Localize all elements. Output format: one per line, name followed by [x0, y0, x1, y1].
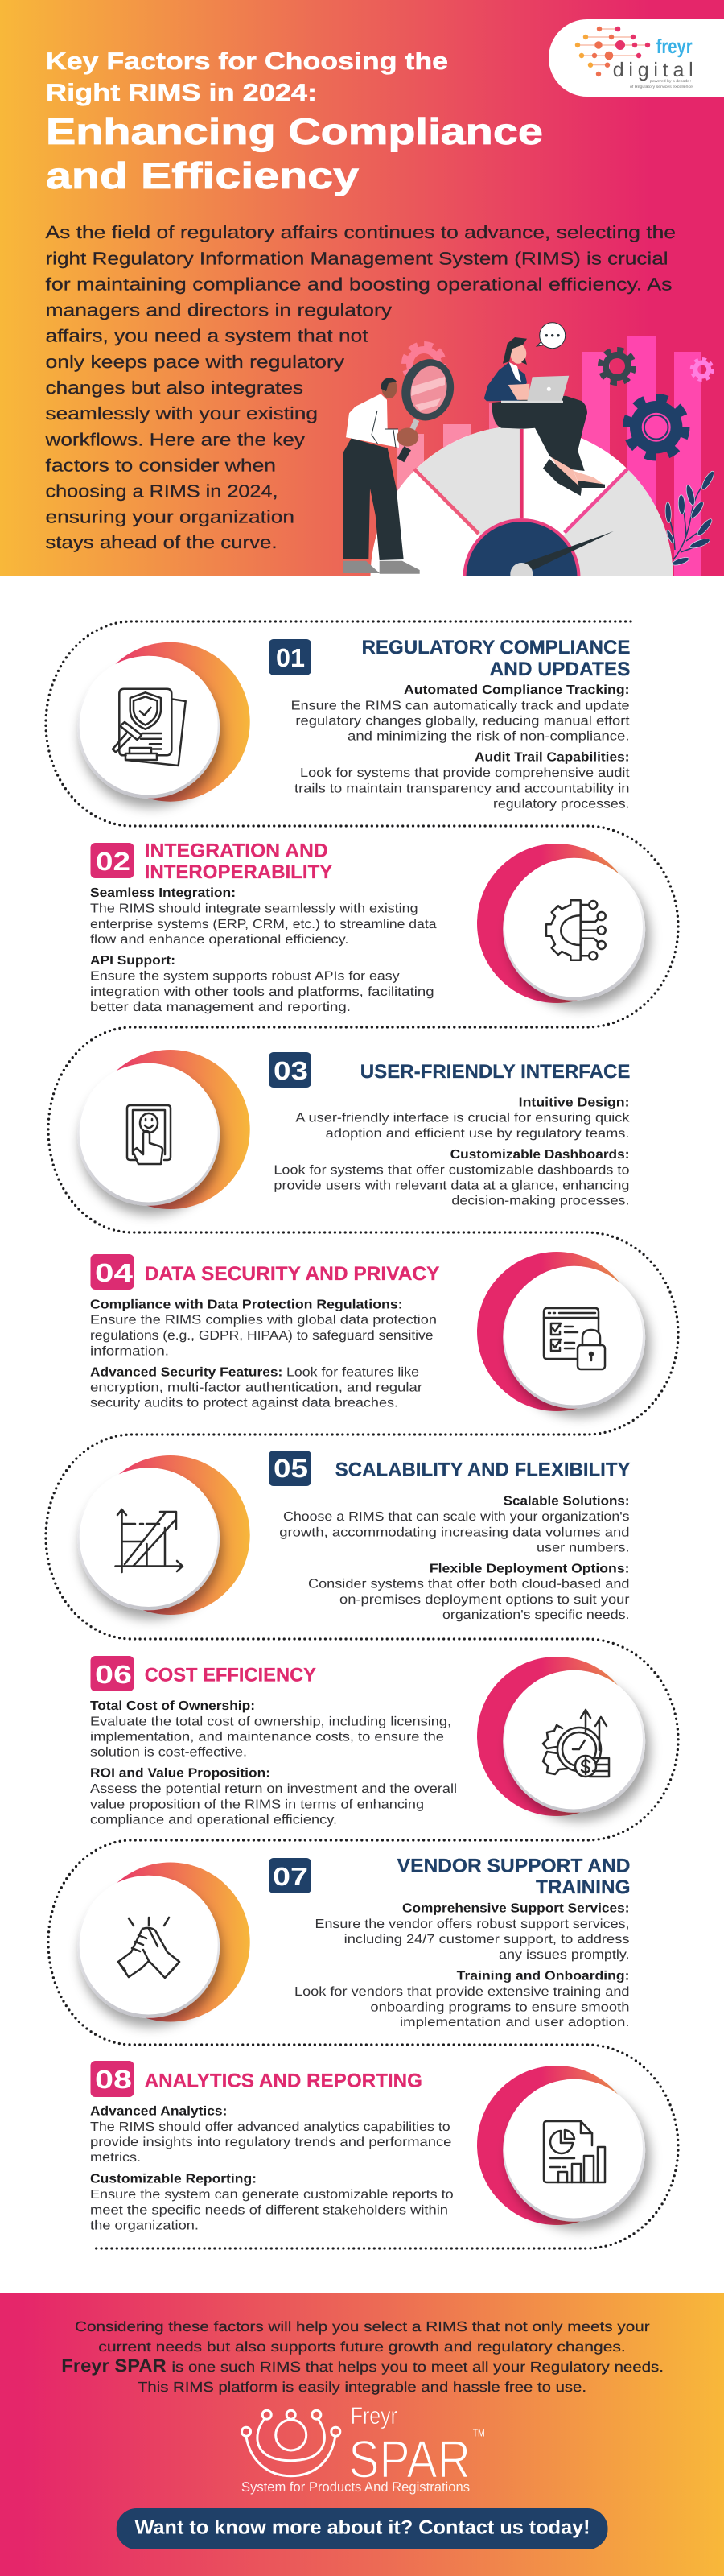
body text: The RIMS should integrate seamlessly with existing	[90, 902, 418, 916]
closing text: Freyr SPAR	[61, 2355, 167, 2376]
body text: Advanced Security Features:	[90, 1365, 282, 1379]
number badge 06: 06	[95, 1660, 132, 1689]
section 06: cost efficiency	[90, 1656, 645, 1827]
intro paragraph: right Regulatory Information Management System (RIMS) is crucial	[45, 248, 668, 268]
section 02: integration	[90, 840, 645, 1014]
body text: Ensure the RIMS can automatically track and update	[291, 699, 630, 712]
body text: adoption and efficient use by regulatory teams.	[326, 1127, 629, 1141]
body text: growth, accommodating increasing data volumes and	[279, 1525, 629, 1539]
body text	[279, 1494, 630, 1622]
heading: REGULATORY COMPLIANCE	[362, 637, 631, 658]
body text: regulatory changes globally, reducing manual effort	[295, 715, 630, 729]
heading: DATA SECURITY AND PRIVACY	[145, 1263, 439, 1285]
closing text: This RIMS platform is easily integrable and hassle free to use.	[138, 2379, 586, 2395]
call to action button	[117, 2508, 607, 2549]
circle icon: report with charts	[477, 2066, 645, 2225]
body text: API Support:	[90, 954, 175, 968]
navy gear	[627, 398, 686, 457]
gauge dial	[370, 427, 673, 576]
body text: Ensure the vendor offers robust support services,	[315, 1918, 629, 1931]
intro paragraph	[44, 222, 676, 552]
body text: Customizable Dashboards:	[450, 1148, 629, 1162]
circle icon: gear circuit	[477, 844, 645, 1003]
number badge 03: 03	[274, 1056, 308, 1085]
heading: INTEGRATION AND	[145, 840, 328, 861]
title: Right RIMS in 2024:	[46, 80, 317, 106]
body text: regulations (e.g., GDPR, HIPAA) to safeguard sensitive	[90, 1329, 434, 1343]
dark gear	[600, 349, 634, 383]
body text: implementation and user adoption.	[400, 2016, 629, 2029]
section 04: data security	[90, 1252, 645, 1411]
heading	[145, 840, 332, 883]
body text: regulatory processes.	[493, 798, 629, 811]
woman with laptop	[484, 323, 605, 496]
logo: Freyr SPAR: System for Products And Registrations	[241, 2479, 470, 2495]
number badge 01	[269, 639, 311, 675]
logo: Freyr SPAR	[241, 2403, 485, 2495]
title: Key Factors for Choosing the	[46, 48, 448, 75]
footer gradient background	[0, 2293, 724, 2576]
heading: VENDOR SUPPORT AND	[397, 1855, 631, 1877]
body text: Ensure the RIMS complies with global data protection	[90, 1314, 437, 1327]
body text: compliance and operational efficiency.	[90, 1813, 337, 1827]
body text: Compliance with Data Protection Regulations:	[90, 1298, 403, 1311]
body text: information.	[90, 1344, 169, 1358]
number badge 02: 02	[96, 847, 130, 876]
body text: Assess the potential return on investment and the overall	[90, 1782, 457, 1796]
body text: enterprise systems (ERP, CRM, etc.) to streamline data	[90, 918, 437, 931]
logo: freyr digital: freyr	[656, 35, 693, 58]
body text: Total Cost of Ownership:	[90, 1699, 255, 1713]
number badge 03	[269, 1052, 311, 1088]
small pink gear	[692, 359, 713, 380]
body text: Look for systems that provide comprehensive audit	[300, 766, 630, 780]
logo: Freyr SPAR: SPAR	[348, 2429, 471, 2489]
background bars	[397, 336, 701, 576]
closing text: is one such RIMS that helps you to meet all your Regulatory needs.	[172, 2359, 664, 2375]
body text: implementation, and maintenance costs, to ensure the	[90, 1731, 444, 1744]
body text: Training and Onboarding:	[457, 1970, 629, 1984]
body text: value proposition of the RIMS in terms of enhancing	[90, 1798, 424, 1811]
intro paragraph: choosing a RIMS in 2024,	[45, 481, 278, 501]
body text: better data management and reporting.	[90, 1001, 351, 1014]
closing text: current needs but also supports future growth and regulatory changes.	[98, 2339, 626, 2355]
section 08: analytics	[90, 2061, 645, 2233]
body text: Choose a RIMS that can scale with your organization's	[283, 1510, 629, 1524]
illustration: gauge with two professionals	[343, 322, 714, 576]
body text: solution is cost-effective.	[90, 1746, 247, 1760]
section 01: regulatory compliance	[77, 637, 630, 811]
pale gear	[404, 345, 444, 383]
heading: TRAINING	[536, 1876, 631, 1898]
intro paragraph: for maintaining compliance and boosting operational efficiency. As	[45, 274, 673, 294]
logo: freyr digital: powered by a decade+	[650, 79, 692, 84]
body text: decision-making processes.	[451, 1195, 629, 1208]
body text: A user-friendly interface is crucial for ensuring quick	[295, 1112, 631, 1125]
body text: encryption, multi-factor authentication, and regular	[90, 1381, 423, 1395]
logo: Freyr SPAR: Freyr	[351, 2403, 397, 2429]
heading: ANALYTICS AND REPORTING	[145, 2070, 422, 2091]
body text: Ensure the system supports robust APIs for easy	[90, 969, 400, 984]
body text	[90, 886, 437, 1014]
heading: INTEROPERABILITY	[145, 861, 332, 883]
body text: Evaluate the total cost of ownership, including licensing,	[90, 1715, 451, 1728]
body text: including 24/7 customer support, to address	[344, 1933, 629, 1946]
body text	[90, 2105, 454, 2233]
circle icon: cost clock and gears	[477, 1657, 645, 1816]
logo: freyr digital: of Regulatory services excellence	[630, 85, 693, 89]
man with magnifying glass	[343, 353, 460, 574]
number badge 08	[90, 2061, 134, 2097]
number badge 05	[269, 1451, 311, 1486]
body text: Look for systems that offer customizable dashboards to	[274, 1163, 630, 1177]
header panel	[0, 0, 724, 636]
body text: integration with other tools and platforms, facilitating	[90, 985, 434, 999]
intro paragraph: workflows. Here are the key	[44, 429, 305, 449]
intro paragraph: managers and directors in regulatory	[45, 300, 392, 320]
circle icon: compliance document	[77, 642, 250, 802]
body text: user numbers.	[537, 1541, 629, 1554]
intro paragraph: factors to consider when	[45, 455, 276, 475]
circle icon: touch screen smile	[77, 1050, 250, 1209]
body text: The RIMS should offer advanced analytics capabilities to	[90, 2120, 450, 2134]
number badge 07: 07	[273, 1862, 308, 1891]
body text: Scalable Solutions:	[504, 1494, 629, 1508]
heading: COST EFFICIENCY	[145, 1664, 316, 1686]
body text: Ensure the system can generate customizable reports to	[90, 2188, 454, 2202]
closing text: Considering these factors will help you select a RIMS that not only meets your	[75, 2318, 650, 2334]
body text: Automated Compliance Tracking:	[404, 683, 629, 697]
circle icon: growth chart	[77, 1455, 250, 1615]
heading: AND UPDATES	[489, 658, 631, 680]
body text: Customizable Reporting:	[90, 2173, 257, 2186]
intro paragraph: stays ahead of the curve.	[45, 532, 277, 552]
body text: Intuitive Design:	[519, 1096, 629, 1109]
body text: the organization.	[90, 2219, 199, 2233]
body text: flow and enhance operational efficiency.	[90, 933, 348, 947]
body text	[274, 1096, 631, 1208]
body text: Audit Trail Capabilities:	[475, 751, 629, 765]
body text: Flexible Deployment Options:	[430, 1562, 629, 1575]
body text: Look for features like	[286, 1365, 419, 1379]
body text	[294, 1901, 629, 2029]
call to action button: Want to know more about it? Contact us today!	[135, 2517, 590, 2539]
circle icon: secure checklist window	[477, 1252, 645, 1411]
heading	[362, 637, 631, 680]
body text: meet the specific needs of different stakeholders within	[90, 2203, 448, 2217]
body text: Comprehensive Support Services:	[402, 1901, 629, 1916]
heading: SCALABILITY AND FLEXIBILITY	[335, 1459, 631, 1481]
title	[46, 48, 543, 196]
heading	[397, 1855, 631, 1898]
intro paragraph: only keeps pace with regulatory	[45, 352, 344, 372]
logo: freyr digital	[549, 19, 724, 97]
number badge 07	[269, 1858, 311, 1893]
number badge 06	[90, 1656, 134, 1691]
number badge 02	[90, 843, 134, 878]
title: and Efficiency	[46, 155, 360, 196]
footer panel	[0, 2293, 724, 2576]
intro paragraph: As the field of regulatory affairs continues to advance, selecting the	[45, 222, 676, 242]
number badge 08: 08	[95, 2065, 132, 2094]
body text: organization's specific needs.	[442, 1608, 629, 1622]
body text: Look for vendors that provide extensive training and	[294, 1985, 629, 1999]
header gradient background	[0, 0, 724, 576]
body text: Advanced Analytics:	[90, 2105, 227, 2119]
body text: ROI and Value Proposition:	[90, 1767, 270, 1781]
body text	[90, 1699, 457, 1827]
body text: and minimizing the risk of non-compliance.	[348, 730, 629, 744]
section 05: scalability	[77, 1451, 630, 1622]
body text: provide users with relevant data at a glance, enhancing	[274, 1179, 629, 1193]
body text: Seamless Integration:	[90, 886, 236, 900]
intro paragraph: changes but also integrates	[45, 378, 303, 398]
heading: USER-FRIENDLY INTERFACE	[360, 1061, 631, 1083]
body text: on-premises deployment options to suit your	[339, 1593, 630, 1607]
intro paragraph: seamlessly with your existing	[45, 403, 318, 423]
intro paragraph: ensuring your organization	[45, 507, 294, 527]
logo: Freyr SPAR: TM	[473, 2427, 485, 2439]
body text	[291, 683, 630, 811]
number badge 04	[90, 1254, 134, 1290]
number badge 05: 05	[274, 1454, 308, 1483]
closing text	[61, 2318, 664, 2395]
body text: security audits to protect against data breaches.	[90, 1397, 398, 1410]
intro paragraph: affairs, you need a system that not	[45, 326, 368, 346]
body text	[90, 1298, 437, 1410]
body text: onboarding programs to ensure smooth	[370, 2000, 629, 2014]
body text: Consider systems that offer both cloud-based and	[308, 1578, 629, 1591]
circle icon: handshake	[77, 1863, 250, 2022]
logo: freyr digital: digital	[613, 59, 693, 81]
section 07: vendor support	[77, 1855, 630, 2029]
plant leaves	[665, 469, 716, 567]
dotted connector path	[46, 621, 678, 2248]
body text: metrics.	[90, 2151, 141, 2165]
number badge 04: 04	[95, 1258, 133, 1287]
number badge 01: 01	[276, 643, 305, 672]
section 03: user-friendly interface	[77, 1050, 631, 1209]
body text: trails to maintain transparency and accountability in	[294, 782, 629, 795]
body text: provide insights into regulatory trends and performance	[90, 2136, 452, 2149]
body text: any issues promptly.	[499, 1948, 629, 1962]
title: Enhancing Compliance	[46, 110, 543, 152]
